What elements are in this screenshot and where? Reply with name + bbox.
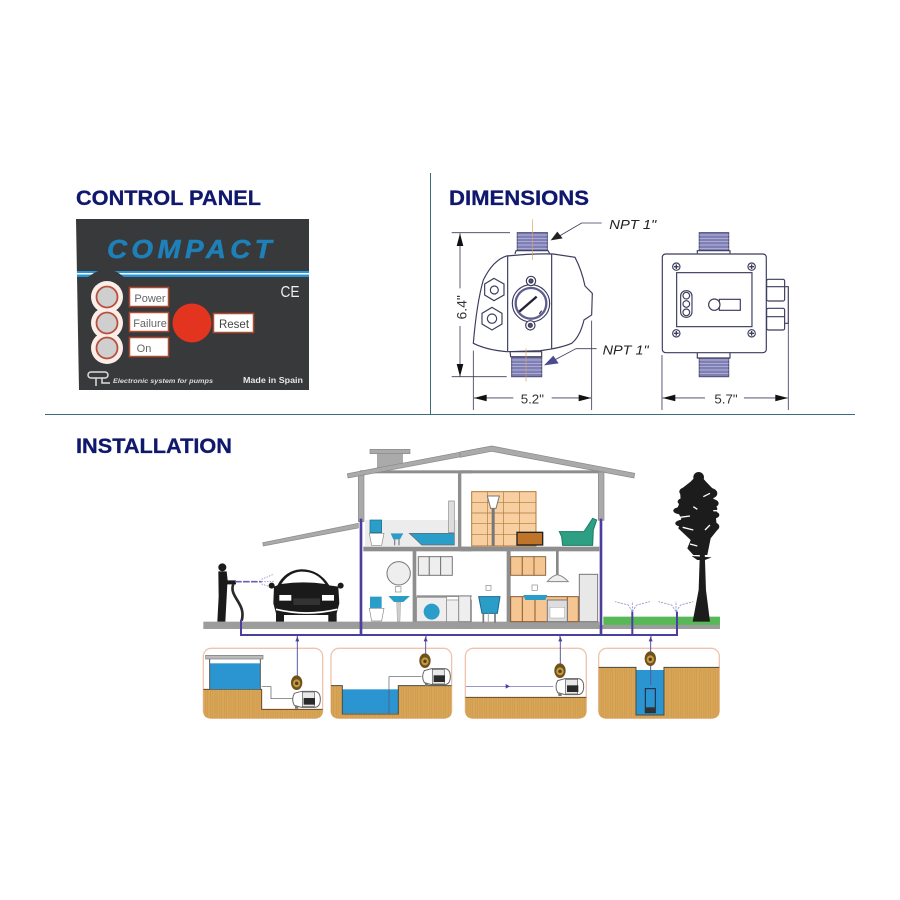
scenes: pump installations A and B — [203, 637, 452, 718]
dimension 5.2 inch: 5.2" — [521, 392, 544, 407]
water pipes left — [241, 519, 472, 640]
back view of device — [662, 233, 788, 377]
downstairs bathroom — [369, 562, 410, 622]
made in Spain: Made in Spain — [243, 376, 303, 385]
armchair — [559, 518, 597, 545]
roof and walls — [459, 446, 720, 629]
label: Reset: Reset — [219, 319, 250, 331]
indicator lights — [91, 281, 123, 364]
heading: installation: INSTALLATION — [76, 435, 232, 458]
tree — [673, 472, 719, 622]
chimney — [370, 449, 410, 468]
fridge — [579, 574, 598, 622]
callout: NPT 1 inch top — [551, 217, 658, 240]
heading: control panel: CONTROL PANEL — [76, 187, 261, 210]
car — [269, 569, 344, 622]
water pipes right — [457, 519, 677, 640]
divider vertical — [430, 173, 431, 414]
range hood — [547, 551, 568, 582]
scene: submersible in well — [599, 637, 719, 718]
label: Failure: Failure — [133, 318, 167, 330]
kitchen counter — [511, 585, 578, 622]
label: Failure — [130, 312, 168, 332]
upstairs bathroom — [365, 501, 458, 546]
reset button — [172, 304, 212, 342]
blue stripe — [77, 270, 309, 277]
laundry tub — [459, 585, 500, 623]
sprinklers — [615, 601, 693, 612]
brand name: COMPACT: COMPACT — [107, 234, 276, 264]
label: On — [130, 338, 168, 356]
kitchen cabinets — [511, 557, 546, 575]
illustration: house right half — [457, 446, 720, 640]
dimension 5.7 inch: 5.7" — [714, 392, 738, 407]
man with hose — [217, 563, 274, 622]
dimension 6.4 inch — [452, 233, 510, 377]
diagram: dimensions — [452, 217, 788, 410]
illustration: house left half — [203, 449, 472, 640]
laundry — [417, 557, 472, 622]
heading: dimensions: DIMENSIONS — [449, 187, 589, 210]
scene: underground reservoir — [331, 637, 452, 718]
chest — [517, 532, 543, 545]
scenes: pump installations C and D — [465, 637, 719, 718]
panel: control panel faceplate — [76, 219, 309, 390]
label: Power — [130, 288, 168, 306]
tagline: Electronic system for pumps — [113, 378, 213, 385]
logo — [88, 372, 110, 386]
scene: in-line supply — [465, 637, 586, 718]
wood panel wall — [472, 492, 536, 546]
label: Reset — [214, 314, 254, 332]
label: On: On — [137, 343, 151, 355]
dimension 6.4 inch: 6.4" — [454, 295, 470, 320]
label: Power: Power — [134, 293, 166, 305]
dimension 5.2 inch — [473, 321, 592, 410]
structure — [203, 450, 472, 629]
scene: elevated tank — [203, 637, 323, 718]
callout: NPT 1 inch bottom — [544, 342, 650, 365]
dimension 5.7 inch — [662, 323, 788, 410]
CE mark: CE — [280, 284, 300, 301]
callout: NPT 1 inch bottom: NPT 1" — [603, 342, 650, 357]
front view of device — [473, 219, 592, 382]
callout: NPT 1 inch top: NPT 1" — [609, 217, 658, 232]
